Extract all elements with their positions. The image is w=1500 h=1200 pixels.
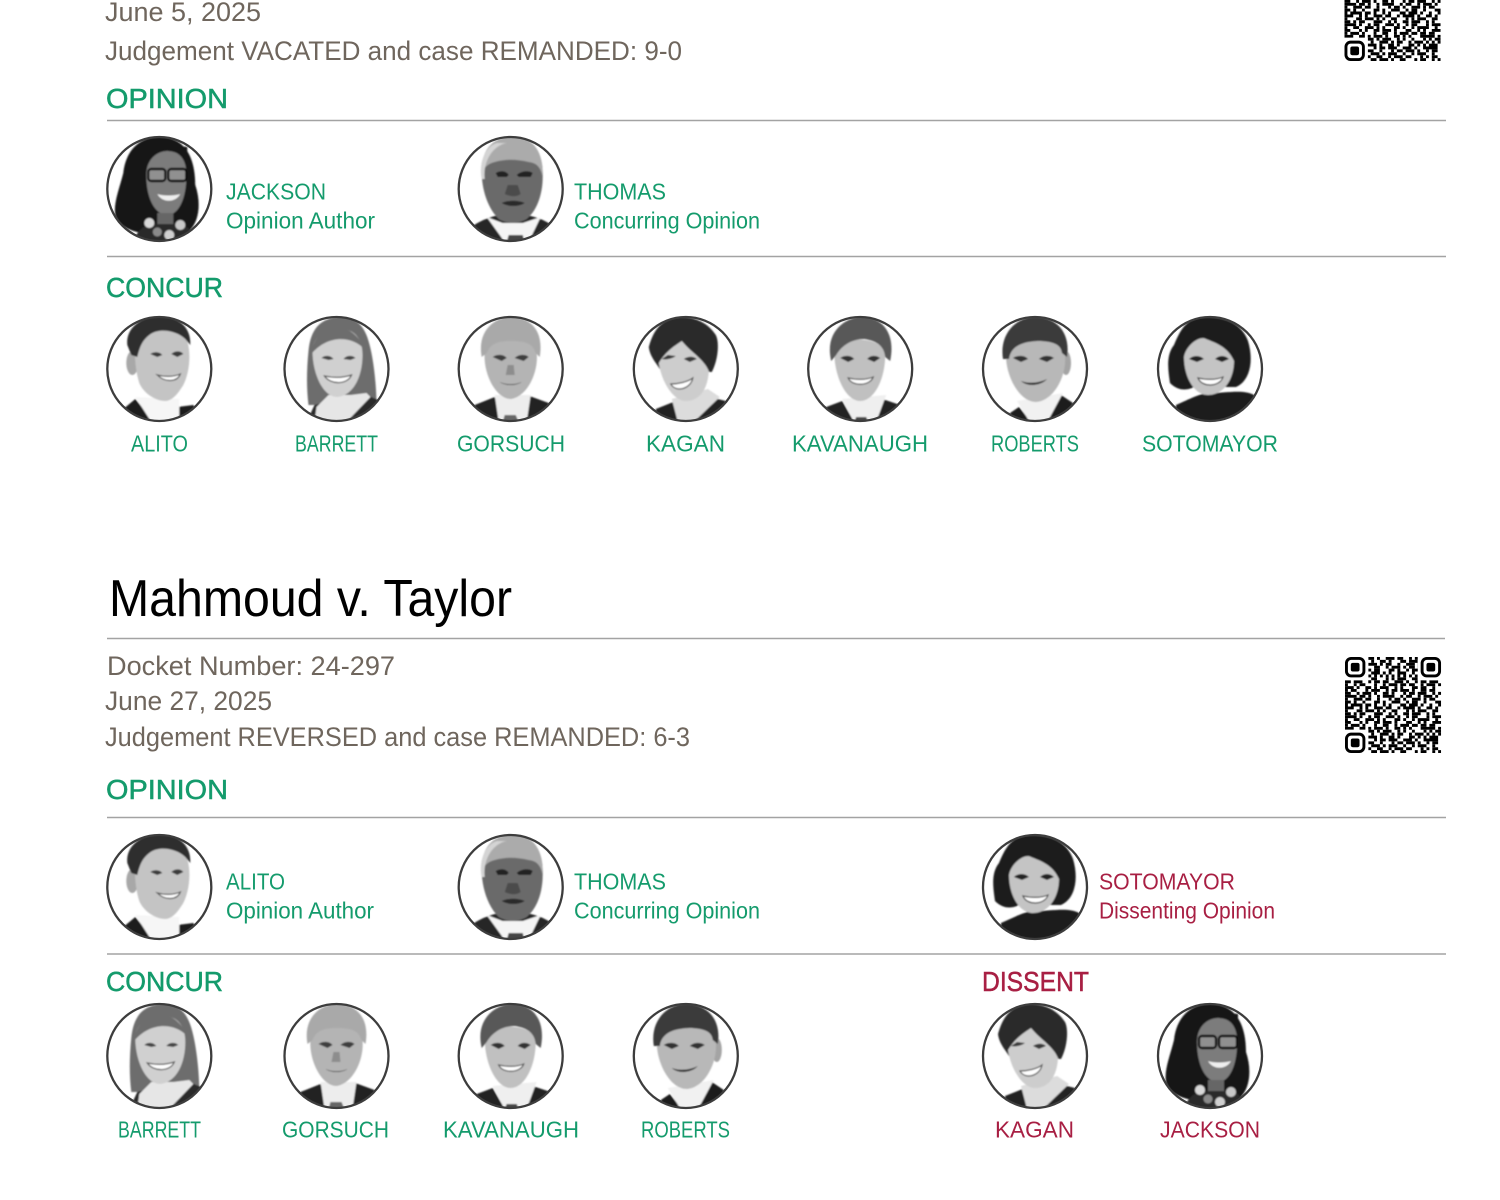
justice: Kavanaugh: KAVANAUGH (792, 430, 928, 456)
concurring opinion: Thomas: THOMAS (574, 178, 666, 204)
justice: Jackson (dissent): JACKSON (1160, 1116, 1260, 1142)
panel: Mahmoud v. Taylor (105, 570, 1446, 1142)
text block: docket number: Docket Number: 24-297 (107, 651, 395, 681)
text block: decision date: June 27, 2025 (105, 686, 272, 716)
dissenting opinion: Sotomayor (983, 835, 1275, 940)
concurring opinion: Thomas (459, 835, 760, 940)
concurring opinion: Thomas: Concurring Opinion (574, 208, 760, 234)
text block: judgement: Judgement VACATED and case REMANDED: 9-0 (105, 36, 682, 66)
justice: Gorsuch: GORSUCH (282, 1116, 389, 1142)
heading: concur: CONCUR (106, 966, 223, 997)
justice: Alito: ALITO (131, 430, 188, 456)
justice: Roberts: ROBERTS (641, 1116, 730, 1142)
justice: Kagan (634, 317, 738, 456)
heading: concur: CONCUR (106, 272, 223, 303)
concurring opinion: Thomas: THOMAS (574, 868, 666, 894)
icon: QR code (1344, 0, 1441, 61)
justice: Barrett (107, 1004, 211, 1142)
heading: opinion: OPINION (106, 774, 228, 805)
opinion author: Alito: Opinion Author (226, 898, 374, 924)
heading: opinion: OPINION (106, 83, 228, 114)
justice: Barrett (284, 317, 388, 456)
opinion author: Jackson: Opinion Author (226, 208, 375, 234)
justice: Kagan: KAGAN (646, 430, 725, 456)
justice: Jackson (dissent) (1158, 1004, 1262, 1142)
justice: Roberts: ROBERTS (991, 430, 1079, 456)
justice: Gorsuch: GORSUCH (457, 430, 565, 456)
panel: first case, top section (105, 0, 1446, 456)
justice: Kagan (dissent): KAGAN (995, 1116, 1074, 1142)
concurring opinion: Thomas (459, 137, 760, 242)
opinion author: Alito: ALITO (226, 868, 285, 894)
justice: Gorsuch (282, 1004, 389, 1142)
dissenting opinion: Sotomayor: SOTOMAYOR (1099, 868, 1235, 894)
justice: Gorsuch (457, 317, 565, 456)
justice: Barrett: BARRETT (118, 1116, 201, 1142)
icon: QR code (1345, 657, 1441, 753)
opinion author: Jackson (107, 137, 375, 242)
concurring opinion: Thomas: Concurring Opinion (574, 898, 760, 924)
justice: Kavanaugh (443, 1004, 579, 1142)
heading: dissent: DISSENT (982, 966, 1089, 997)
justice: Sotomayor: SOTOMAYOR (1142, 430, 1278, 456)
justice: Kagan (dissent) (983, 1004, 1087, 1142)
justice: Roberts (634, 1004, 738, 1142)
justice: Kavanaugh: KAVANAUGH (443, 1116, 579, 1142)
title: Mahmoud v. Taylor (109, 570, 512, 628)
dissenting opinion: Sotomayor: Dissenting Opinion (1099, 898, 1275, 924)
justice: Barrett: BARRETT (295, 430, 378, 456)
opinion author: Jackson: JACKSON (226, 178, 326, 204)
text block: judgement: Judgement REVERSED and case REMANDED: 6-3 (105, 722, 690, 752)
justice: Alito (107, 316, 211, 456)
justice: Sotomayor (1142, 317, 1278, 456)
justice: Kavanaugh (792, 317, 928, 456)
opinion author: Alito (107, 834, 374, 940)
justice: Roberts (983, 317, 1087, 456)
